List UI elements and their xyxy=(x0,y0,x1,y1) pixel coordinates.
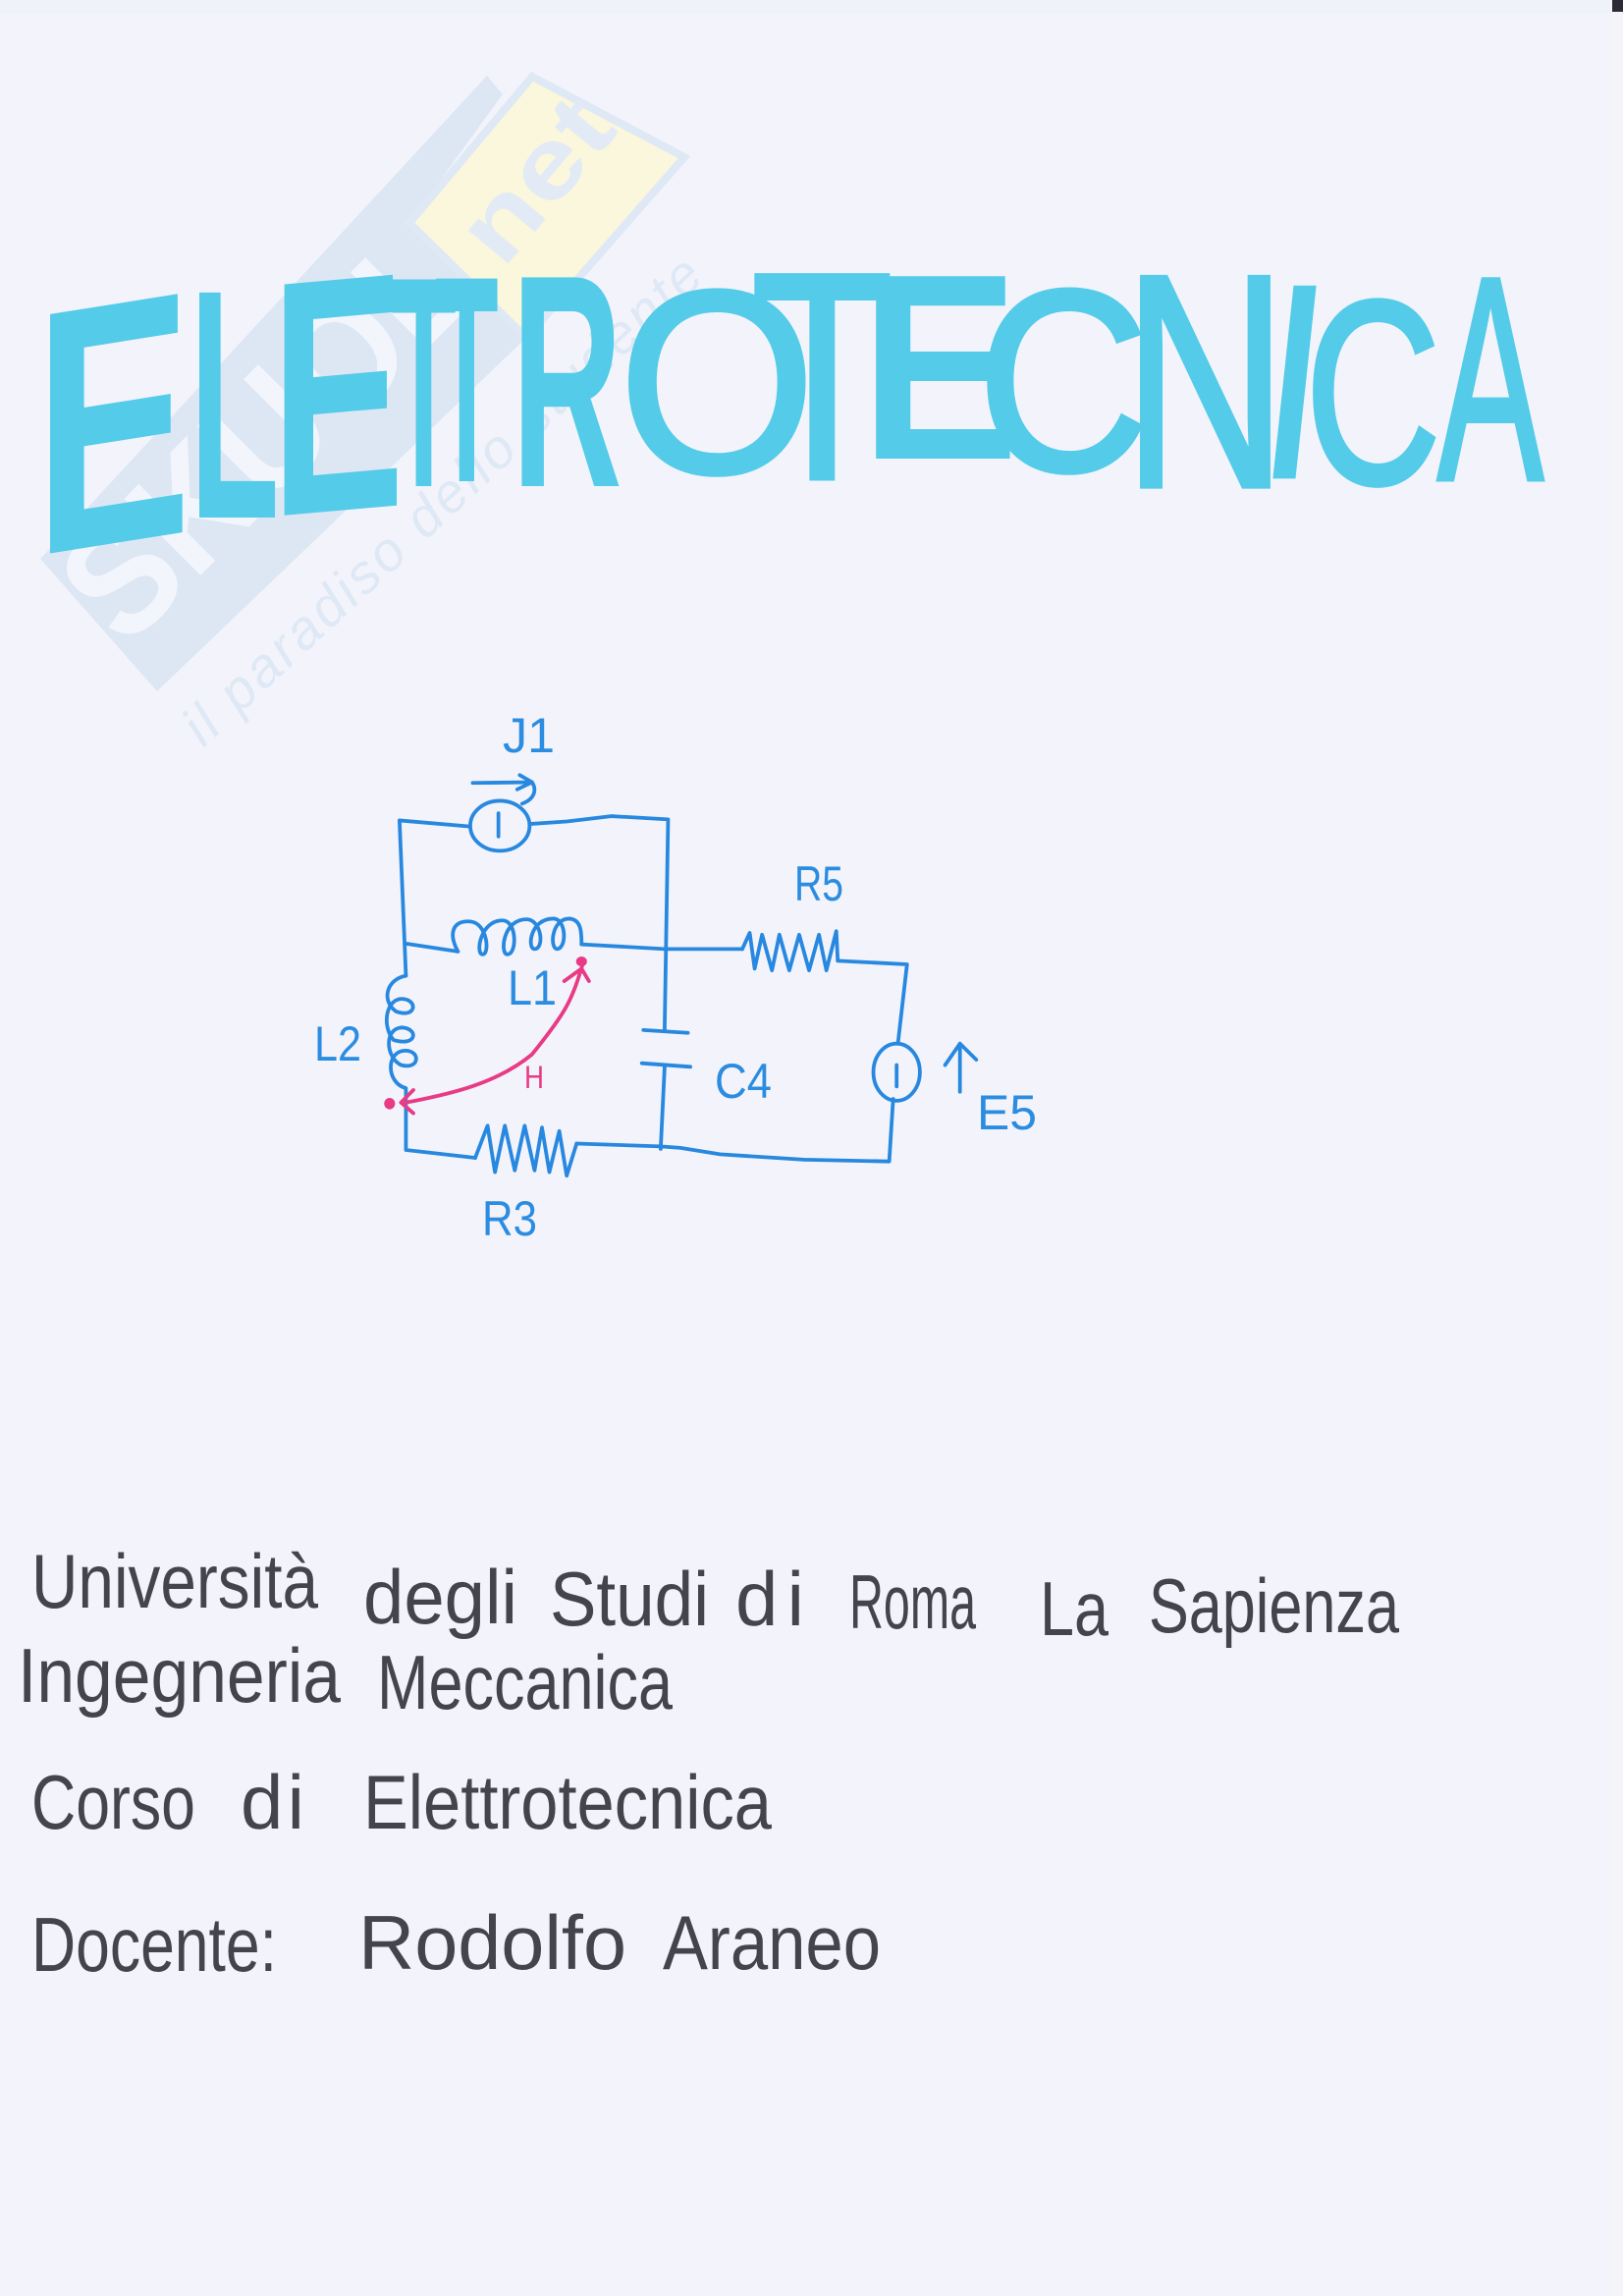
capacitor C4 xyxy=(642,1030,690,1066)
title: ELETTROTECNICA: R xyxy=(512,211,622,551)
wires xyxy=(400,816,907,1162)
text line: university: La xyxy=(1040,1565,1109,1652)
text line: university: Studi xyxy=(550,1556,709,1642)
text line: lecturer: Araneo xyxy=(663,1899,881,1986)
label H: H xyxy=(524,1060,544,1095)
title: ELETTROTECNICA: C xyxy=(1305,246,1441,539)
inductor L1 xyxy=(453,918,581,955)
title: ELETTROTECNICA: E xyxy=(271,201,405,588)
title: ELETTROTECNICA: L xyxy=(189,221,280,587)
text line: university: Sapienza xyxy=(1149,1562,1399,1649)
watermark: net lettering: net xyxy=(435,74,636,284)
inductor L2 xyxy=(387,976,416,1088)
label R3: R3 xyxy=(482,1191,537,1246)
watermark: tagline: il paradiso dello studente xyxy=(169,243,714,757)
watermark: blue band xyxy=(40,76,526,691)
title: ELETTROTECNICA: C xyxy=(977,236,1149,525)
text line: course xyxy=(31,1759,773,1845)
source E5 xyxy=(874,1044,976,1101)
text line: university xyxy=(31,1538,1399,1652)
watermark: Skuola.net logo xyxy=(25,74,714,757)
text line: lecturer: Docente: xyxy=(31,1901,277,1988)
title: ELETTROTECNICA: T xyxy=(751,212,893,541)
label C4: C4 xyxy=(715,1054,772,1109)
label L2: L2 xyxy=(314,1016,361,1071)
circuit diagram xyxy=(314,708,1037,1246)
source J1 xyxy=(470,775,534,850)
text line: degree: Meccanica xyxy=(377,1639,673,1725)
title: ELETTROTECNICA: T xyxy=(391,214,457,550)
title: ELETTROTECNICA: T xyxy=(435,214,499,544)
label L1: L1 xyxy=(508,960,557,1015)
watermark: yellow diamond xyxy=(409,77,684,338)
resistor R3 xyxy=(475,1125,576,1175)
text line: university: Università xyxy=(31,1538,319,1624)
title: ELETTROTECNICA: E xyxy=(860,219,1019,516)
text line: degree xyxy=(18,1632,673,1725)
text line: course: di xyxy=(241,1759,304,1845)
label R5: R5 xyxy=(794,856,843,911)
text line: lecturer xyxy=(31,1899,881,1988)
text line: course: Elettrotecnica xyxy=(363,1759,773,1845)
text line: university: di xyxy=(735,1556,804,1642)
title: ELETTROTECNICA xyxy=(34,201,1543,630)
circuit wires and components xyxy=(384,775,976,1175)
title: ELETTROTECNICA: O xyxy=(619,238,816,528)
title: ELETTROTECNICA: E xyxy=(34,217,191,630)
text line: lecturer: Rodolfo xyxy=(358,1899,626,1986)
text line: university: Roma xyxy=(849,1558,976,1645)
resistor R5 xyxy=(742,931,838,970)
text line: course: Corso xyxy=(31,1759,195,1845)
label E5: E5 xyxy=(977,1085,1037,1140)
text line: degree: Ingegneria xyxy=(18,1632,342,1719)
text line: university: degli xyxy=(363,1554,517,1640)
label J1: J1 xyxy=(503,708,555,763)
title: ELETTROTECNICA: A xyxy=(1437,217,1543,541)
watermark: SKUOLA lettering: SKUOLA xyxy=(25,119,579,674)
pink arc H xyxy=(384,957,589,1114)
title: ELETTROTECNICA: I xyxy=(1250,229,1339,535)
title: ELETTROTECNICA: N xyxy=(1123,211,1287,551)
